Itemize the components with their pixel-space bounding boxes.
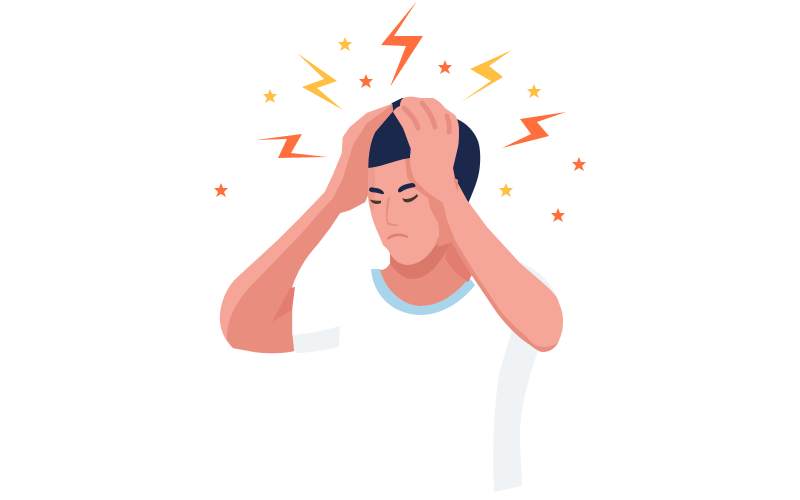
hand side crease (453, 177, 458, 193)
finger shading (404, 103, 449, 132)
arm underside shadow (443, 203, 558, 352)
star: red far right (572, 157, 586, 171)
right eyebrow (398, 183, 415, 192)
arm and hand (393, 97, 563, 347)
star: yellow right (527, 84, 541, 98)
face shading along hand (405, 158, 452, 247)
bolt: left (256, 134, 327, 158)
bolt: right (502, 112, 566, 148)
star: yellow left (263, 89, 277, 103)
face (368, 155, 452, 265)
shirt: sleeve and side shading (292, 262, 559, 492)
left closed eye (370, 200, 381, 204)
arm: right (393, 97, 563, 352)
hair: front (368, 108, 411, 168)
forearm shading (227, 105, 393, 353)
hair: back of head (385, 98, 480, 204)
star: red far left (214, 183, 228, 197)
neck (380, 230, 473, 306)
nose (386, 197, 399, 226)
stars (214, 37, 586, 222)
bolt: upper right (461, 50, 512, 102)
bolt: upper left (297, 53, 343, 110)
star: yellow top (338, 37, 352, 51)
collar (371, 269, 475, 315)
elbow crease (272, 287, 295, 322)
left eyebrow (369, 187, 384, 194)
star: red lower right (551, 208, 565, 222)
right closed eye (402, 194, 418, 202)
forehead shading (368, 168, 375, 212)
star: red center-right (438, 60, 452, 74)
star: yellow lower right (499, 183, 513, 197)
arm: left (220, 104, 393, 353)
star: red center-left (359, 74, 373, 88)
mouth (387, 234, 408, 240)
lightning bolts (256, 1, 566, 158)
bolt: top (381, 1, 423, 87)
